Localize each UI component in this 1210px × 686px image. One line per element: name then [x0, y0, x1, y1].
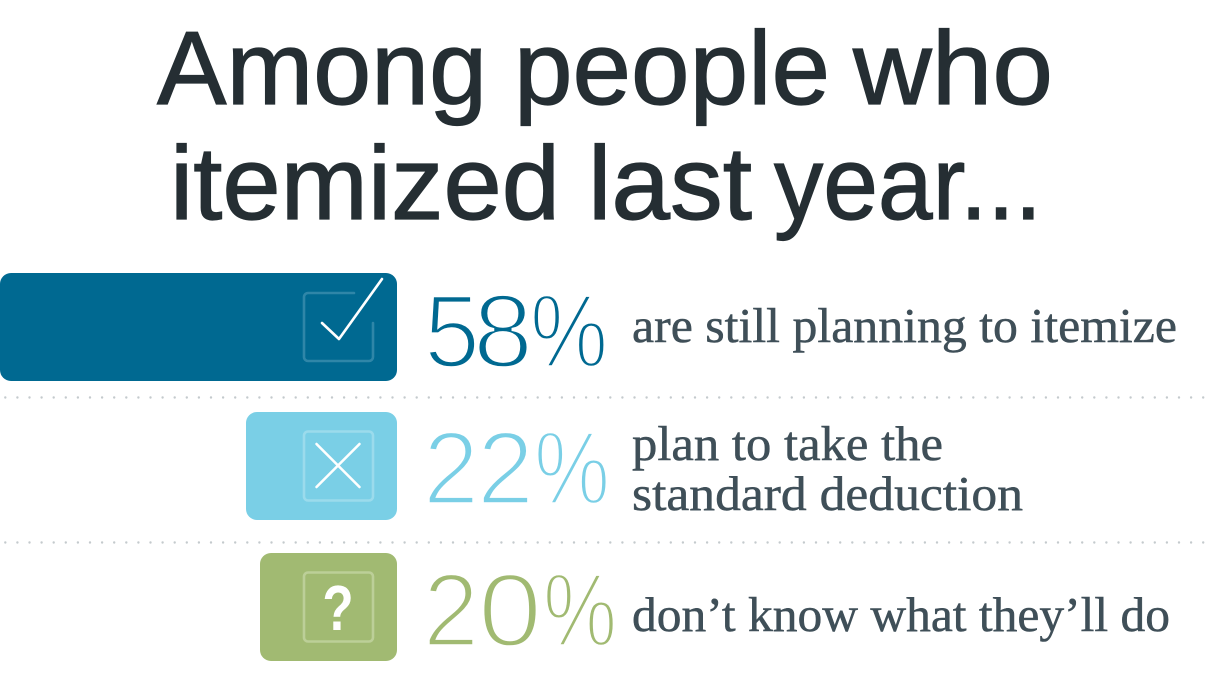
title: who [852, 11, 1053, 127]
icon: checkbox with check mark [304, 279, 382, 361]
value: 58%: % [530, 274, 608, 390]
value: 58% [424, 274, 608, 390]
value: 20%: % [543, 553, 617, 669]
row: 22% standard deduction [246, 411, 1023, 527]
label: don't know what they'll do: don’t know what they’ll do [632, 587, 1170, 642]
value: 22%: % [534, 411, 610, 527]
icon: checkbox with x mark [304, 432, 373, 500]
value: 20% [423, 553, 617, 669]
value: 58%: 5 [424, 274, 480, 390]
title [157, 11, 1053, 242]
value: 22%: 2 [423, 411, 479, 527]
bar: 58% [0, 273, 397, 381]
row: 58% still planning to itemize [0, 273, 1177, 390]
icon: checkbox with question mark [304, 572, 373, 644]
title: itemized [170, 126, 560, 242]
label: plan to take the standard deduction: plan to take the [632, 416, 943, 471]
bar: 20% [260, 553, 397, 661]
title: Among [157, 11, 487, 127]
value: 20%: 0 [478, 553, 542, 669]
row: 20% don't know [260, 553, 1170, 669]
title: year... [774, 126, 1042, 242]
value: 20%: 2 [423, 553, 479, 669]
label: are still planning to itemize: are still planning to itemize [632, 298, 1177, 353]
title: last [588, 126, 752, 242]
value: 58%: 8 [473, 274, 533, 390]
bar: 22% [246, 412, 397, 520]
label: plan to take the standard deduction [632, 416, 1023, 521]
icon: checkbox with question mark: ? [322, 574, 354, 644]
title: people [514, 11, 830, 127]
value: 22%: 2 [477, 411, 534, 527]
value: 22% [423, 411, 610, 527]
label: plan to take the standard deduction: standard deduction [632, 466, 1023, 521]
